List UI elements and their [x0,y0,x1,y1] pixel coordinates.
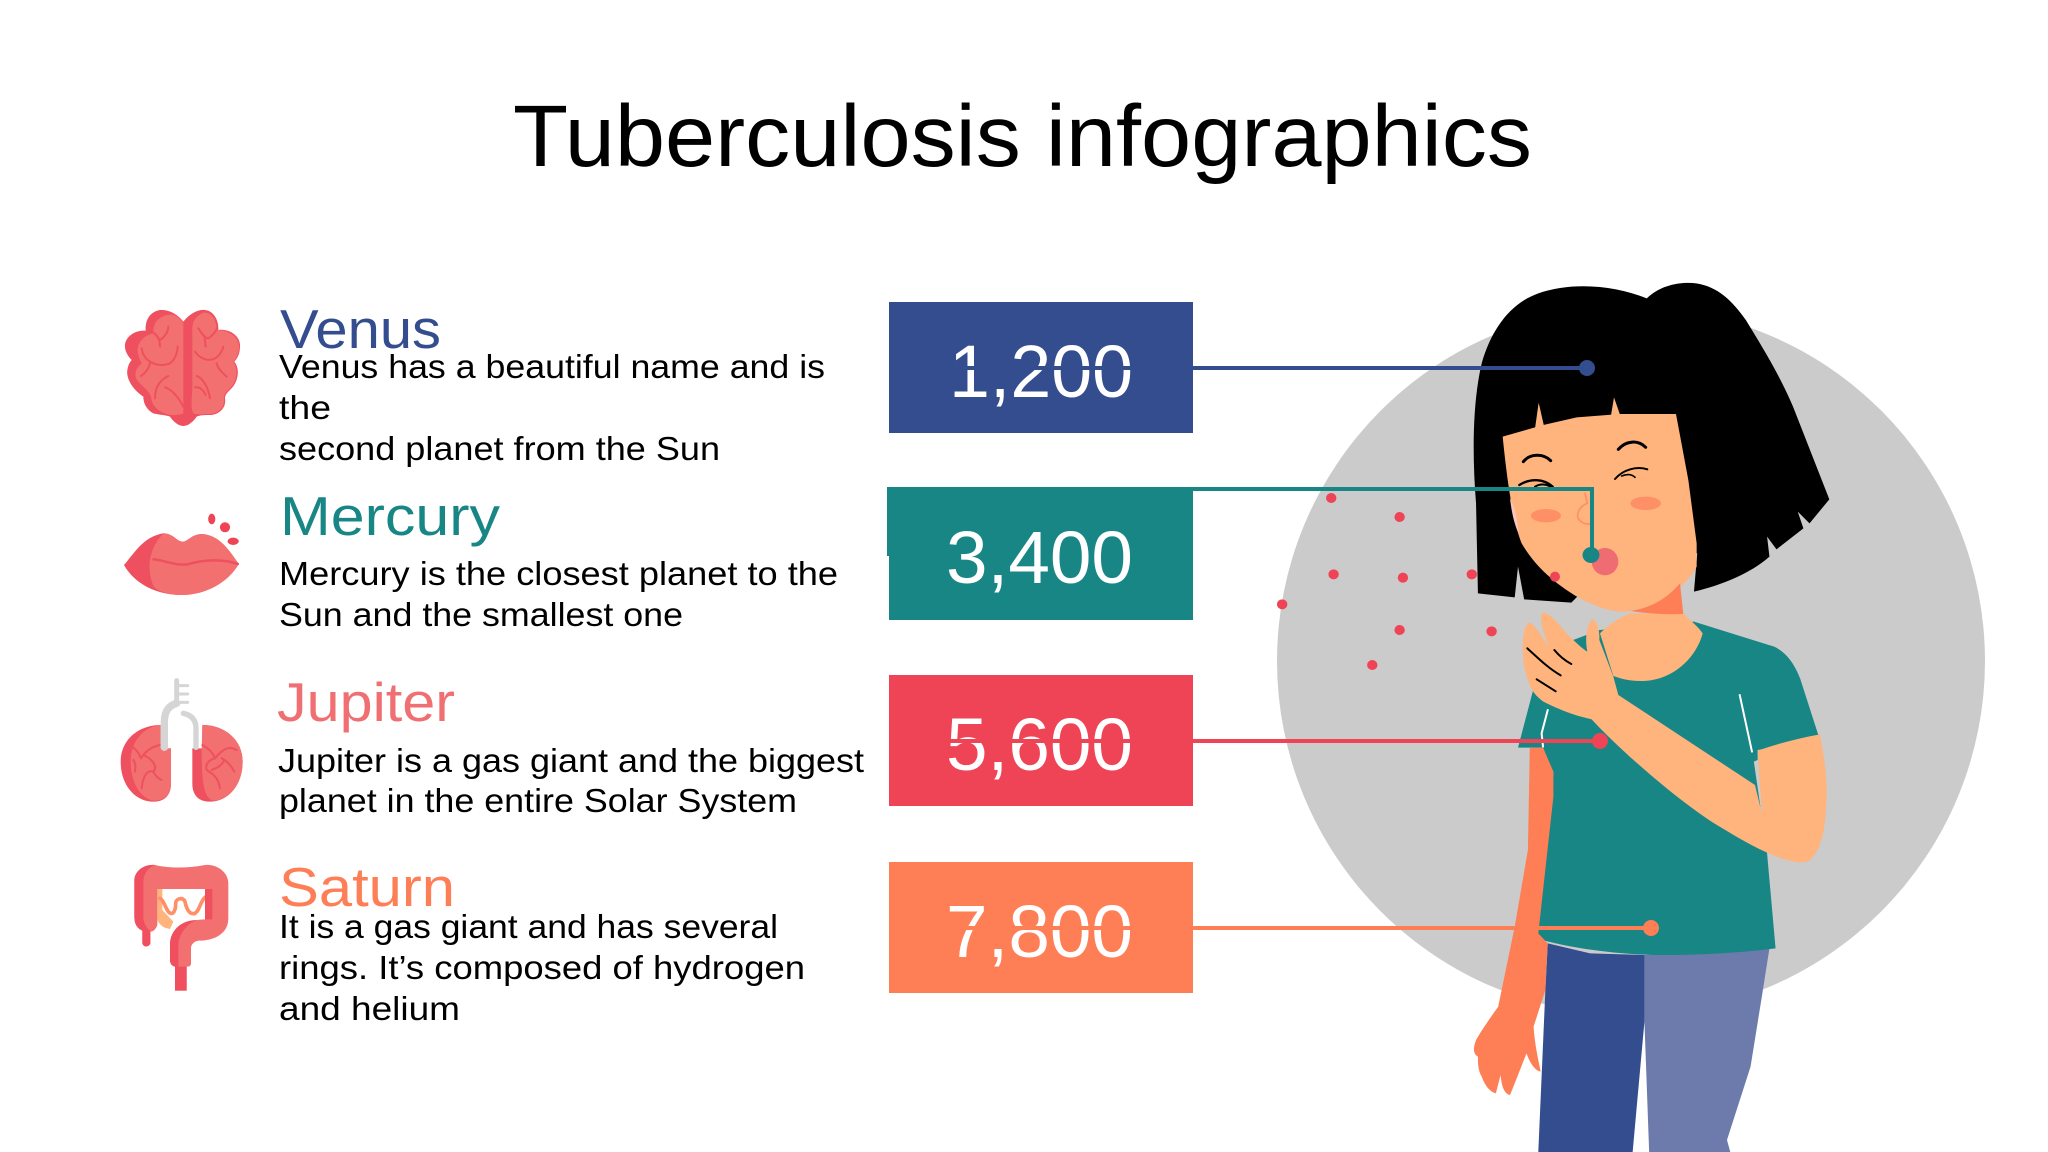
icon: lips [124,514,239,595]
forearm and hand [1523,613,1767,852]
stat box: 5,600: 5,600 [946,703,1133,786]
stat box: 1,200 [889,302,1193,433]
left arm [1474,748,1553,1095]
eyes and brows [1519,442,1647,487]
item: Saturn: It is a gas giant and has several [279,908,778,945]
icon: lungs [121,681,243,802]
head details [1503,397,1697,614]
icon: brain [125,310,240,426]
cheeks [1531,497,1661,522]
droplets [1277,493,1497,670]
neck shadow [1631,583,1683,614]
upper right arm [1758,734,1827,862]
hand lines [1527,648,1571,691]
fringe slivers [1535,397,1620,429]
item: Saturn: Saturn [279,856,455,918]
item: Venus [279,298,825,467]
face [1503,414,1697,612]
item: Saturn: and helium [279,990,460,1027]
mouth [1592,548,1618,575]
item: Venus: Venus has a beautiful name and is [279,348,825,385]
stat box: 3,400: 3,400 [946,516,1133,599]
gray circle backdrop [1277,307,1985,1015]
shirt highlights [1542,695,1752,752]
item: Saturn: rings. It’s composed of hydrogen [279,949,805,986]
lower body and hair [1277,283,1829,1152]
item: Mercury: Mercury is the closest planet to the [279,555,838,592]
item: Mercury: Mercury [280,485,501,547]
stat box: 3,400 [887,487,1193,620]
connector: Mercury [889,489,1600,563]
nose [1578,493,1589,524]
icon: intestine [134,865,228,991]
title: Tuberculosis infographics [513,88,1532,185]
item: Mercury [279,485,838,633]
stat box: 5,600 [889,675,1193,806]
stat box: 1,200: 1,200 [949,330,1133,413]
shirt [1518,622,1820,955]
droplet on face [1550,572,1560,582]
item: Mercury: Sun and the smallest one [279,596,683,633]
connector: Venus [889,360,1595,376]
item: Venus: Venus [280,298,441,360]
pants [1538,943,1769,1152]
connector: Jupiter [889,733,1608,749]
item: Jupiter: Jupiter is a gas giant and the biggest [278,742,864,779]
item: Venus: the [279,389,331,426]
stat box: 7,800: 7,800 [946,890,1133,973]
neck lower [1600,613,1703,681]
hair [1474,283,1829,603]
item: Saturn [279,856,805,1027]
item: Jupiter: Jupiter [277,671,455,733]
neck, forearm and hand [1523,613,1767,852]
item: Jupiter [277,671,864,819]
pink cheek edge [1510,498,1519,533]
item: Venus: second planet from the Sun [279,430,720,467]
connector: Saturn [889,920,1659,936]
stat box: 7,800 [889,862,1193,993]
item: Jupiter: planet in the entire Solar System [279,782,797,819]
person coughing [1277,283,1829,1152]
